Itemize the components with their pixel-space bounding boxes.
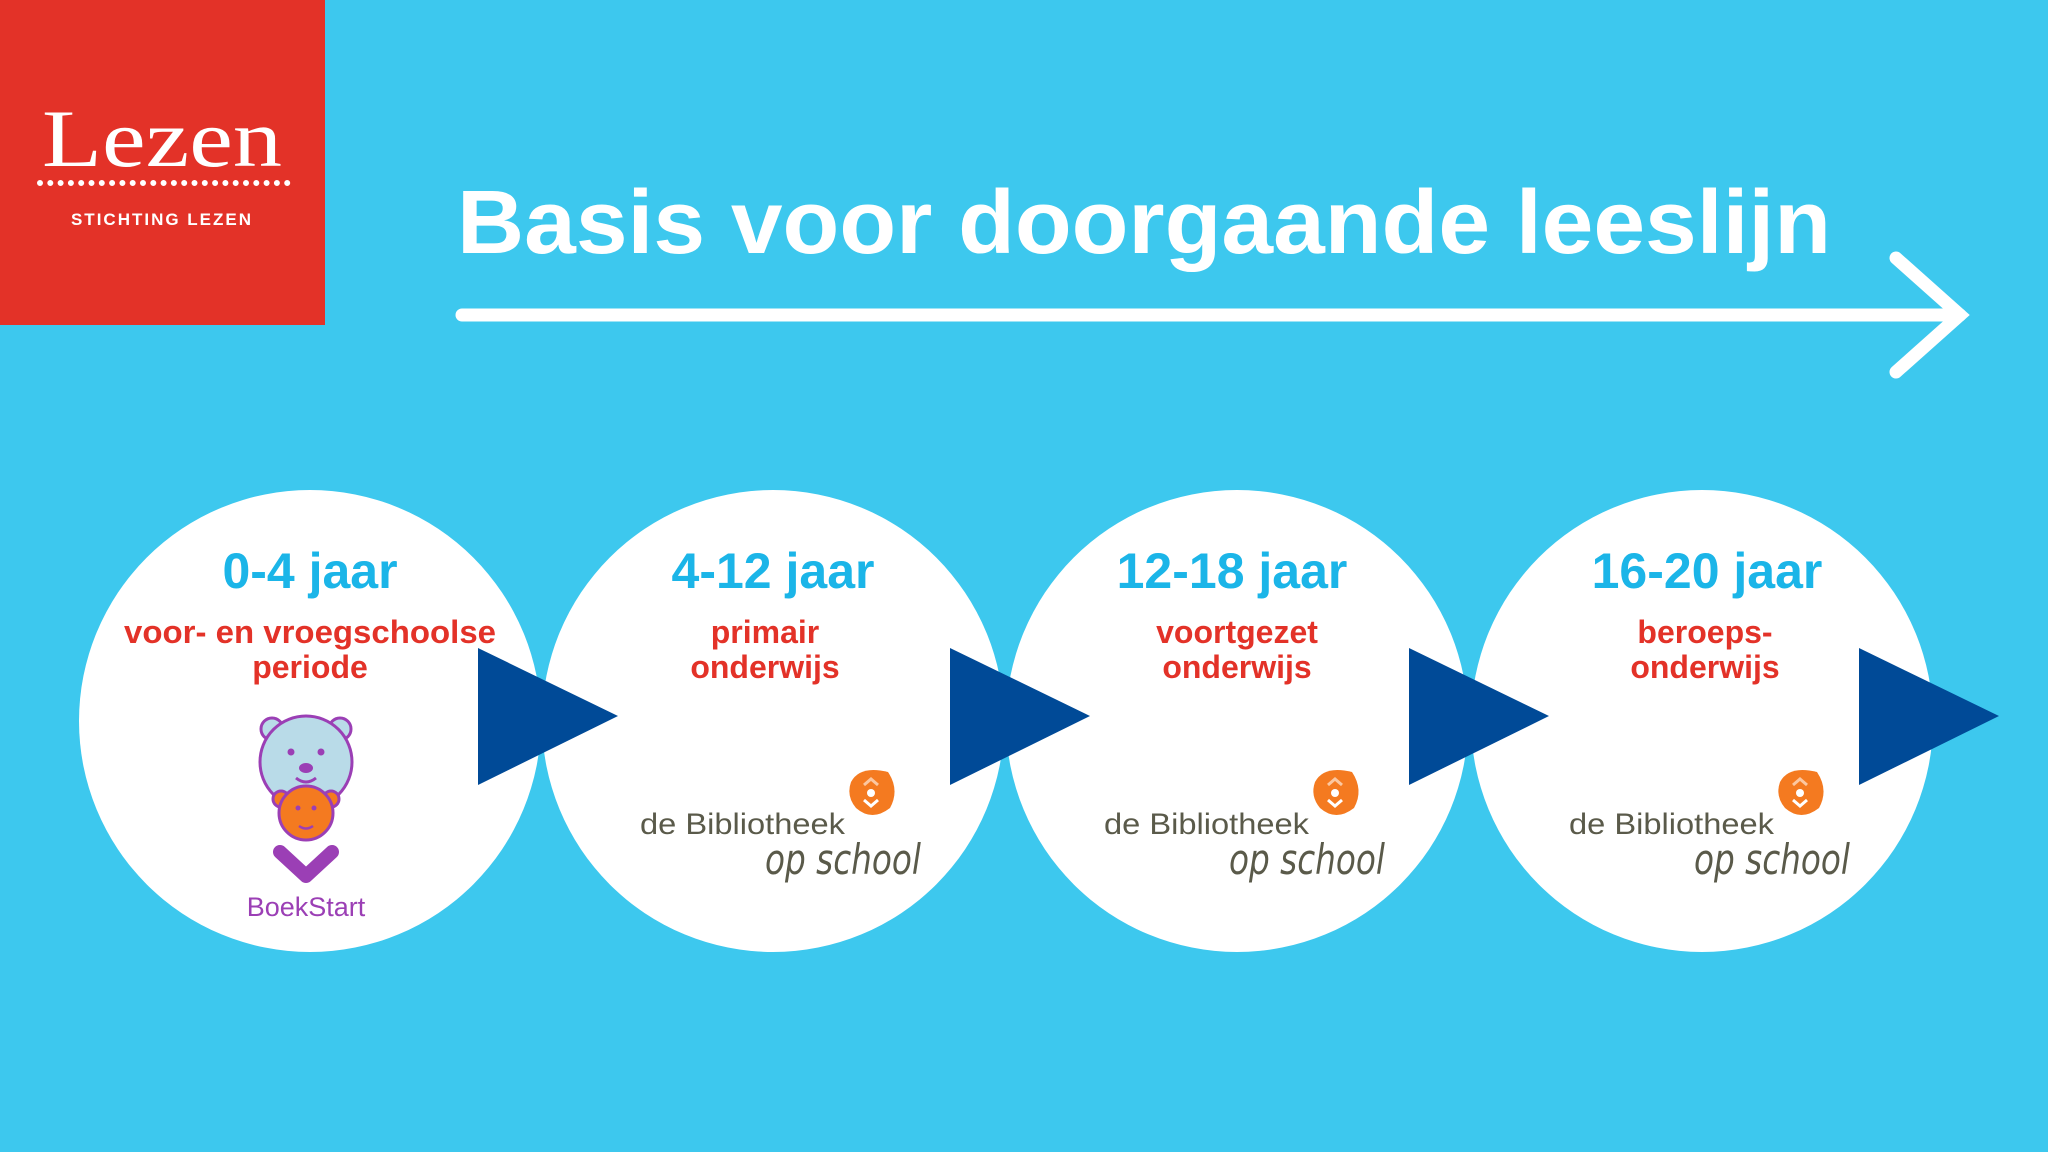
icon: BoekStart bears	[247, 716, 366, 922]
panel: 0-4 jaar	[79, 490, 541, 952]
panel: 0-4 jaar: periode	[252, 649, 368, 685]
panel: 4-12 jaar: 4-12 jaar	[672, 543, 874, 599]
logo: de Bibliotheek op school	[1569, 770, 1850, 884]
panel: 16-20 jaar	[1471, 490, 1933, 952]
icon: BoekStart bears: BoekStart	[247, 892, 366, 922]
panel: 4-12 jaar: primair	[711, 614, 819, 650]
logo: Stichting Lezen	[0, 0, 325, 325]
panel: 16-20 jaar: beroeps-	[1637, 614, 1773, 650]
panel: 12-18 jaar: onderwijs	[1162, 649, 1312, 685]
arrow: triangle 1	[478, 648, 618, 785]
panel: 16-20 jaar: onderwijs	[1630, 649, 1780, 685]
logo: de Bibliotheek op school	[1104, 770, 1385, 884]
logo: de Bibliotheek op school	[640, 770, 921, 884]
panel: 0-4 jaar: 0-4 jaar	[222, 543, 398, 599]
logo: de Bibliotheek op school: op school	[765, 835, 921, 884]
logo: Stichting Lezen: Lezen	[42, 93, 282, 184]
arrow: triangle 3	[1409, 648, 1549, 785]
panel: 4-12 jaar	[542, 490, 1004, 952]
logo: de Bibliotheek op school: op school	[1694, 835, 1850, 884]
panel: 16-20 jaar: 16-20 jaar	[1592, 543, 1822, 599]
panel: 4-12 jaar: onderwijs	[690, 649, 840, 685]
logo: de Bibliotheek op school: op school	[1229, 835, 1385, 884]
arrow: triangle 4	[1859, 648, 1999, 785]
panel: 12-18 jaar	[1006, 490, 1468, 952]
logo: de Bibliotheek op school: de Bibliotheek	[1104, 808, 1310, 841]
arrow: timeline	[462, 258, 1960, 372]
panel: 0-4 jaar: voor- en vroegschoolse	[124, 614, 496, 650]
title: Basis voor doorgaande leeslijn	[457, 173, 1831, 273]
arrow: triangle 2	[950, 648, 1090, 785]
logo: de Bibliotheek op school: de Bibliotheek	[640, 808, 846, 841]
panel: 12-18 jaar: voortgezet	[1156, 614, 1318, 650]
logo: Stichting Lezen: STICHTING LEZEN	[71, 210, 253, 229]
logo: de Bibliotheek op school: de Bibliotheek	[1569, 808, 1775, 841]
panel: 12-18 jaar: 12-18 jaar	[1117, 543, 1347, 599]
